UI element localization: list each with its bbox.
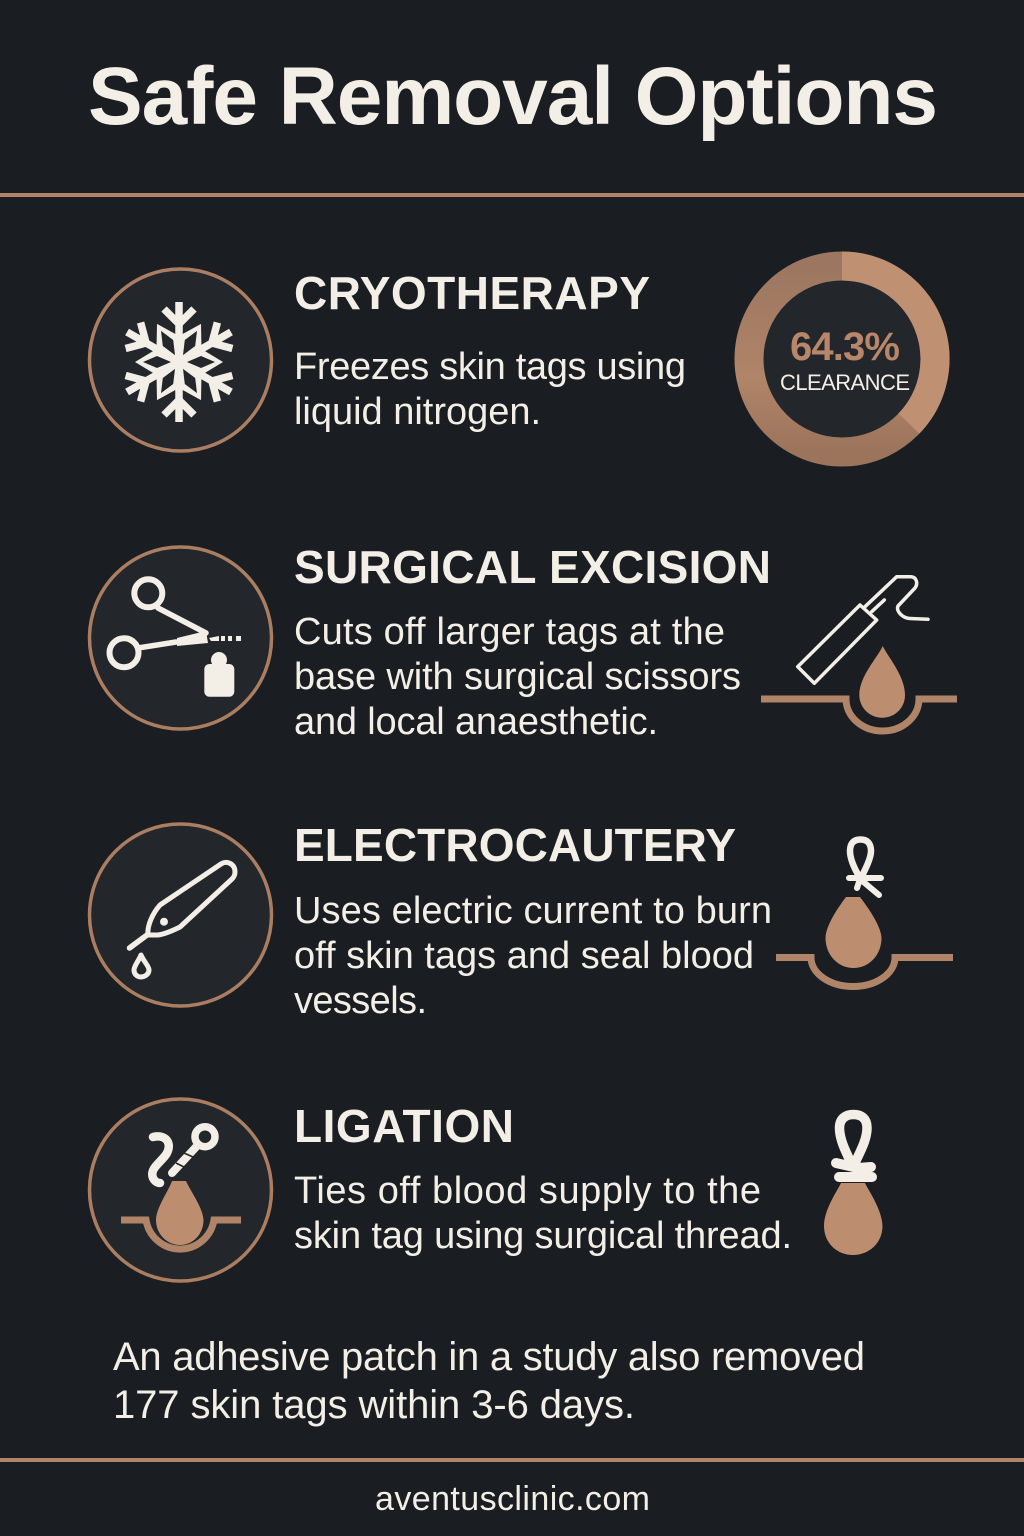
title: Safe Removal Options bbox=[88, 51, 938, 142]
illustration: scalpel over skin bbox=[761, 577, 957, 731]
icon: snowflake bbox=[90, 269, 272, 451]
heading: cryotherapy: CRYOTHERAPY bbox=[294, 267, 650, 319]
description: electrocautery bbox=[294, 890, 772, 1022]
icon: cautery pen bbox=[90, 824, 272, 1006]
note: adhesive patch study: An adhesive patch in a study also removed bbox=[113, 1335, 865, 1379]
panel: electrocautery bbox=[90, 819, 953, 1022]
description: electrocautery: off skin tags and seal blood bbox=[294, 935, 754, 977]
description: cryotherapy: liquid nitrogen. bbox=[294, 391, 541, 433]
donut chart: 64.3% clearance bbox=[749, 266, 935, 452]
description: ligation: skin tag using surgical thread. bbox=[294, 1215, 792, 1257]
heading: surgical excision: SURGICAL EXCISION bbox=[294, 541, 771, 593]
panel: cryotherapy bbox=[90, 266, 935, 452]
heading: electrocautery: ELECTROCAUTERY bbox=[294, 819, 736, 871]
note: adhesive patch study bbox=[113, 1335, 865, 1427]
description: electrocautery: vessels. bbox=[294, 980, 427, 1022]
description: surgical excision bbox=[294, 611, 741, 743]
illustration: tied skin tag bbox=[776, 840, 953, 986]
description: cryotherapy bbox=[294, 346, 686, 433]
description: ligation: Ties off blood supply to the bbox=[294, 1170, 761, 1212]
panel: surgical excision bbox=[90, 541, 957, 743]
donut chart: 64.3% clearance: CLEARANCE bbox=[780, 370, 910, 395]
icon: ligation thread on skin tag bbox=[90, 1099, 272, 1281]
description: ligation bbox=[294, 1170, 792, 1257]
description: surgical excision: Cuts off larger tags at the bbox=[294, 611, 725, 653]
panel: ligation bbox=[90, 1099, 882, 1281]
illustration: ligated skin tag bbox=[824, 1114, 882, 1255]
footer website: aventusclinic.com bbox=[375, 1480, 650, 1518]
icon: scissors and anaesthetic bottle bbox=[90, 547, 272, 729]
description: electrocautery: Uses electric current to burn bbox=[294, 890, 772, 932]
note: adhesive patch study: 177 skin tags within 3-6 days. bbox=[113, 1383, 635, 1427]
donut chart: 64.3% clearance: 64.3% bbox=[790, 325, 900, 369]
description: surgical excision: base with surgical scissors bbox=[294, 656, 741, 698]
description: surgical excision: and local anaesthetic. bbox=[294, 701, 658, 743]
description: cryotherapy: Freezes skin tags using bbox=[294, 346, 686, 388]
heading: ligation: LIGATION bbox=[294, 1100, 514, 1152]
